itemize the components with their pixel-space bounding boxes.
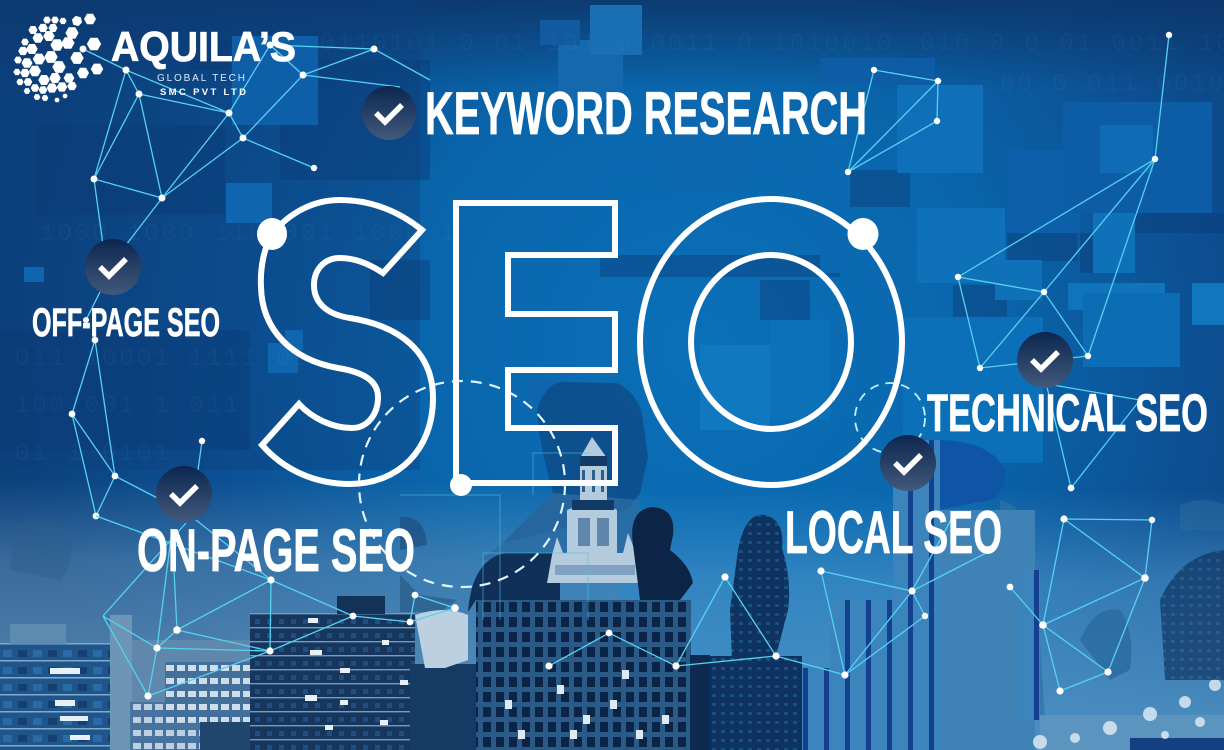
background: 00 0 011 0010	[1000, 71, 1224, 98]
background: 01 1 0101	[15, 441, 172, 468]
SEO outlined lettering	[261, 199, 902, 485]
people silhouettes: back layer	[10, 382, 1224, 720]
background: 0110101 0 01 101 0 0011 0 1010010	[320, 31, 894, 58]
logo mark: hexagon globe	[13, 14, 103, 102]
dashed orbit: large	[359, 381, 565, 587]
network lines: top left	[80, 42, 430, 245]
badge: on-page seo	[156, 466, 212, 522]
background: 1001001 1 011	[15, 393, 241, 420]
network lines: bottom centre	[545, 520, 986, 679]
letter O	[640, 199, 902, 485]
background: 010 0 0 01 0011 10	[920, 31, 1224, 58]
label: off-page seo: OFF-PAGE SEO	[32, 301, 220, 345]
SEO node dots	[257, 218, 878, 496]
logo tagline: GLOBAL TECH	[157, 73, 245, 84]
logo name: AQUILA’S	[111, 23, 296, 70]
label: on-page seo: ON-PAGE SEO	[137, 517, 415, 584]
dashed orbit: small	[855, 383, 925, 453]
letter S	[261, 200, 433, 484]
badge: local seo	[880, 435, 936, 491]
network lines: bottom right	[1007, 515, 1155, 695]
castle tower	[547, 437, 640, 583]
label: keyword research: KEYWORD RESEARCH	[425, 80, 867, 147]
city skyline	[0, 437, 1224, 750]
logo subtitle: SMC PVT LTD	[160, 87, 246, 98]
badge: technical seo	[1017, 332, 1073, 388]
logo	[13, 14, 296, 102]
background: 1000 1000 1100001 1000 1	[40, 221, 458, 248]
network lines: bottom left	[96, 516, 459, 700]
letter E	[456, 203, 615, 483]
people silhouettes: front layer	[632, 507, 1224, 680]
network lines: right	[955, 32, 1172, 491]
badge: off-page seo	[85, 239, 141, 295]
label: local seo: LOCAL SEO	[785, 499, 1002, 566]
background: 011 10001 1111 01	[15, 346, 311, 373]
network lines: left middle	[69, 292, 205, 519]
network lines: top right	[845, 67, 941, 175]
badge: keyword research	[362, 86, 416, 140]
